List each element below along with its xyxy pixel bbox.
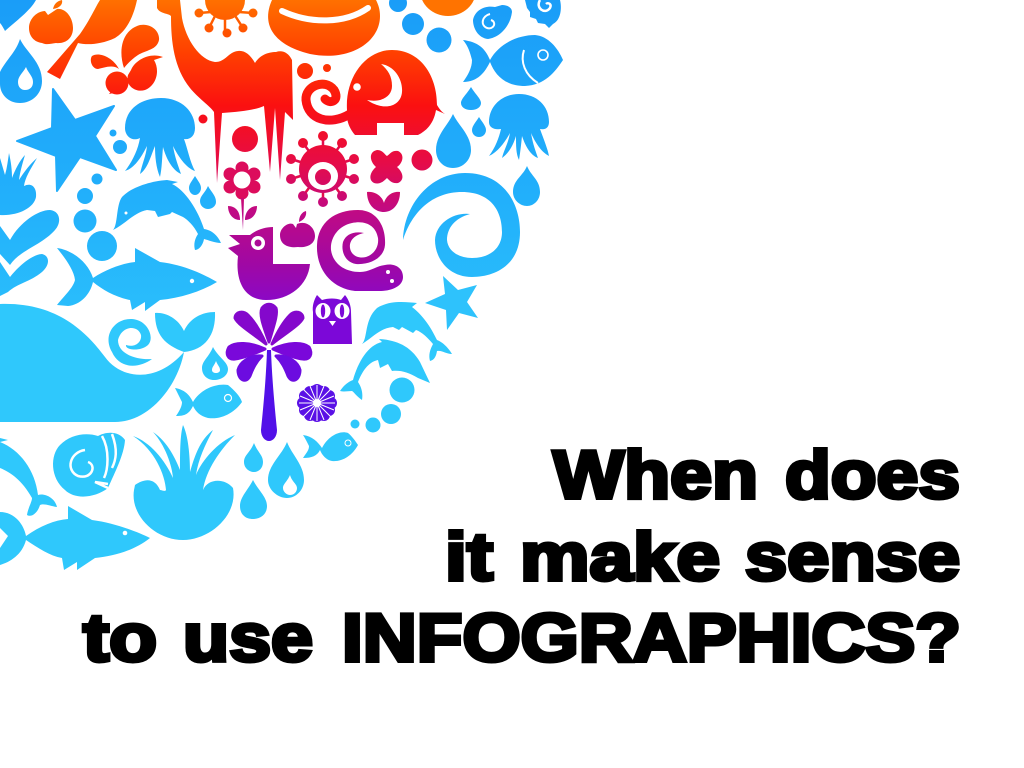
drops right [436,87,540,206]
apple orange [29,0,73,44]
title line 1: When [553,437,758,513]
warm animals group [29,0,476,441]
title line 3: INFOGRAPHICS? [342,600,961,676]
small fish centre [175,385,242,418]
shark lower [0,506,150,570]
dolphin right upper [362,302,452,361]
spiral sun top right [525,0,561,28]
water drop left [0,39,42,103]
camel [157,0,293,183]
title line 3 [83,600,961,676]
whale tail [155,312,215,352]
starfish [17,89,116,191]
jellyfish left [125,98,195,177]
virus [286,131,359,207]
title line 2: sense [745,519,960,595]
purple bird [228,227,310,300]
title line 1: does [785,437,960,513]
whale spiral [109,319,152,366]
bowl [268,0,380,56]
title line 2: it [445,519,493,595]
sun [194,0,258,38]
small star right [425,276,478,330]
title line 1 [553,437,960,513]
cool sea creatures group [0,0,563,330]
dolphin upper [113,180,221,250]
shark upper [57,248,217,311]
title line 2 [445,519,960,595]
drop with hole [202,347,228,380]
purple apple [280,211,315,247]
tulip [367,192,400,212]
top right dots [389,0,452,52]
wing shapes [0,210,59,296]
flower [224,162,260,200]
shell lower [53,433,125,497]
title [83,437,961,676]
ornamental flower [91,25,163,94]
elephant [306,50,445,135]
dolphin lower left [0,438,57,516]
title line 3: to [83,600,157,676]
purple snail spiral [317,210,403,291]
grass plant left [0,153,37,215]
bubbles [350,378,414,432]
title line 2: make [520,519,720,595]
top left drop [0,0,36,31]
big blue spiral [403,173,520,277]
dots left [74,130,127,261]
daisy [297,384,337,422]
jelly plant [133,425,235,540]
owl [313,295,352,344]
flower stem and leaves [228,198,257,230]
bird orange [47,0,137,79]
red dots [198,63,432,170]
title line 3: use [183,600,313,676]
orange half circle [420,0,476,16]
drops lower [240,442,304,519]
palm tree [227,304,311,441]
drops beside dolphin [189,176,216,209]
fish right [463,35,563,86]
dolphin right lower [340,339,430,400]
shell top right [473,5,512,39]
small fish right [303,432,358,461]
jellyfish right [489,94,549,160]
x shape flower [370,150,402,184]
whale [0,304,184,422]
sea creatures lower [0,302,452,570]
